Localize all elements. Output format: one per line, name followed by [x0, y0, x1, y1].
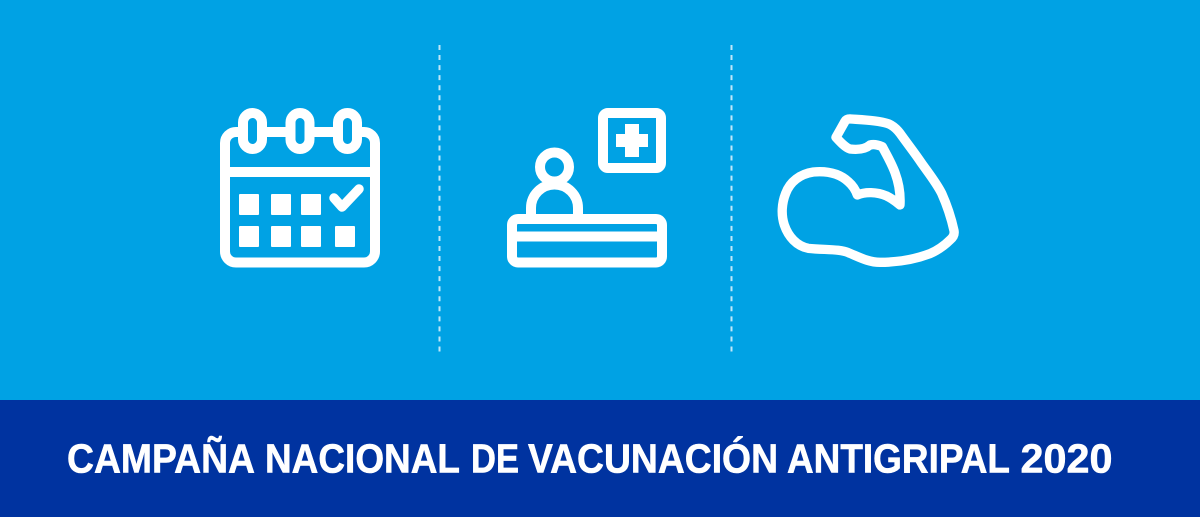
panel: title band [0, 400, 1200, 517]
title: NACIONAL [265, 436, 460, 482]
divider left [438, 45, 440, 354]
icon: medical reception [512, 113, 662, 262]
icon: calendar [225, 113, 375, 262]
title: 2020 [1020, 436, 1112, 482]
title: ANTIGRIPAL [787, 436, 1010, 482]
panel: icons background [0, 0, 1200, 400]
divider right [730, 45, 732, 354]
icon: flexed arm muscle [782, 119, 954, 262]
title: DE [471, 436, 519, 482]
title: VACUNACIÓN [528, 436, 778, 482]
title [67, 436, 1112, 482]
title: CAMPAÑA [67, 436, 255, 482]
